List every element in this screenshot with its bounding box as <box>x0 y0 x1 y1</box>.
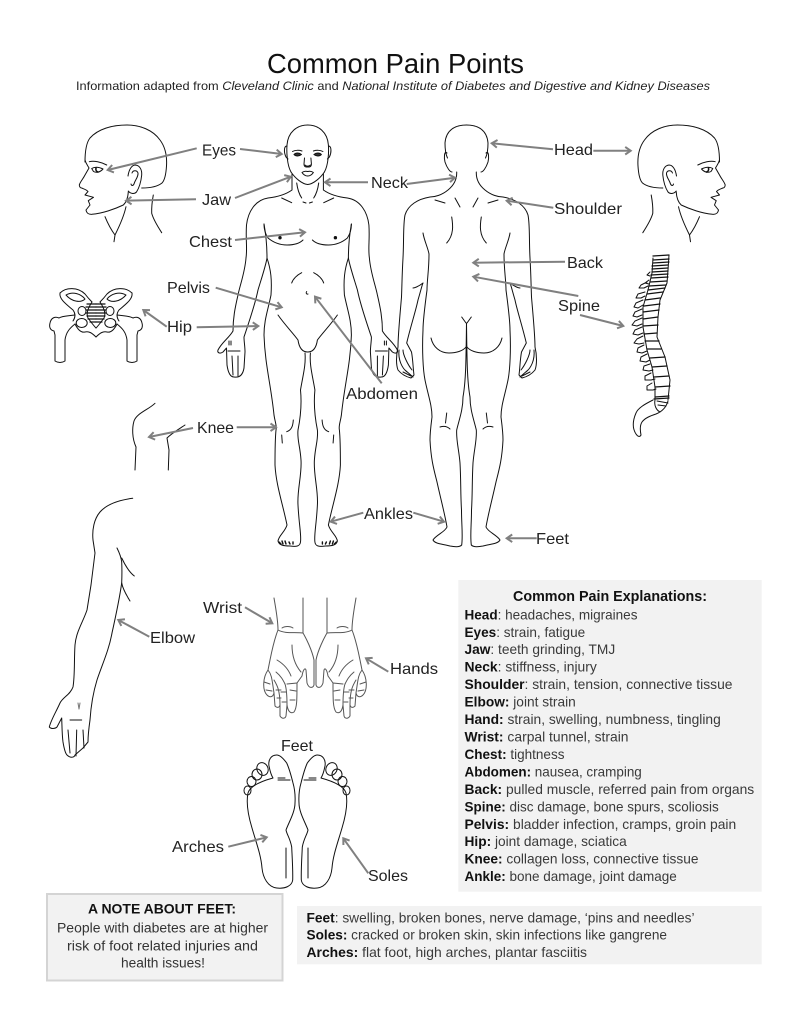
panel: feet explanations <box>297 906 762 964</box>
note body <box>57 921 269 971</box>
arrows <box>108 143 631 873</box>
explanation list: Chest: tightness <box>464 746 564 762</box>
explanation list: Jaw: teeth grinding, TMJ <box>464 641 615 657</box>
panel: common pain explanations <box>458 580 762 892</box>
back body figure <box>396 125 536 547</box>
arrow: hands <box>366 658 388 672</box>
panel: a note about feet <box>47 894 282 980</box>
note body: health issues! <box>121 956 205 971</box>
arrow: knee to front body <box>237 426 276 428</box>
explanation list: Shoulder: strain, tension, connective tissue <box>464 676 733 692</box>
feet explanation list: Arches: flat foot, high arches, plantar fasciitis <box>306 944 587 960</box>
explanation list: Abdomen: nausea, cramping <box>464 763 642 779</box>
explanation list: Pelvis: bladder infection, cramps, groin pain <box>464 816 736 832</box>
icon: feet soles <box>244 755 350 888</box>
arrow: wrist <box>245 607 272 623</box>
front body figure <box>218 125 398 546</box>
icon: spine <box>632 255 670 436</box>
icon: arm <box>49 498 134 757</box>
label: feet: Feet <box>536 531 570 548</box>
arrow: jaw to front body <box>235 177 291 198</box>
note body: People with diabetes are at higher <box>57 921 269 936</box>
arrow: jaw to side head <box>126 199 196 201</box>
explanation list: Hip: joint damage, sciatica <box>464 833 627 849</box>
arrow: eyes to side head <box>108 148 197 170</box>
arrow: neck to front body <box>325 181 368 183</box>
arrow: neck to back body <box>407 178 455 184</box>
explanation list: Eyes: strain, fatigue <box>464 624 585 640</box>
label: head: Head <box>554 142 593 159</box>
note body: risk of foot related injuries and <box>67 938 258 953</box>
explanation list <box>464 606 754 884</box>
arrow: spine to back body <box>473 277 578 296</box>
label: back: Back <box>567 255 604 272</box>
arrow: arches <box>228 837 267 847</box>
explanation list: Neck: stiffness, injury <box>464 659 597 675</box>
arrow: head to back body <box>492 143 553 149</box>
title: Common Pain Points <box>267 48 524 79</box>
body part labels <box>150 142 623 885</box>
arrow: spine to spine icon <box>580 315 623 326</box>
label: eyes: Eyes <box>202 142 236 160</box>
arrow: head to side head <box>593 150 631 152</box>
feet explanation list <box>306 909 694 960</box>
arrow: feet <box>507 537 537 539</box>
arrow: shoulder <box>507 201 553 208</box>
arrow: hip to front body <box>197 326 258 327</box>
note heading: A NOTE ABOUT FEET: <box>88 900 236 916</box>
label: hip: Hip <box>167 319 192 336</box>
icon: side knee <box>133 403 185 470</box>
explanation list: Head: headaches, migraines <box>464 606 638 622</box>
explanation list: Ankle: bone damage, joint damage <box>464 868 677 884</box>
icon: pelvis and hips <box>50 289 142 362</box>
arrow: ankles to back body <box>413 513 444 522</box>
label: soles: Soles <box>368 868 408 885</box>
icon: left-facing head profile <box>79 125 167 242</box>
label: feet above soles: Feet <box>281 738 314 755</box>
icon: right-facing head profile <box>638 125 725 242</box>
arrow: soles <box>343 838 368 873</box>
arrow: pelvis <box>216 288 282 307</box>
label: spine: Spine <box>558 298 600 315</box>
label: elbow: Elbow <box>150 630 195 647</box>
arrow: hip to pelvis bones <box>143 310 167 327</box>
label: ankles: Ankles <box>364 506 413 523</box>
label: hands: Hands <box>390 661 438 678</box>
explanation list: Back: pulled muscle, referred pain from organs <box>464 781 754 797</box>
arrow: back <box>473 262 565 263</box>
label: shoulder: Shoulder <box>554 201 623 218</box>
feet explanation list: Feet: swelling, broken bones, nerve damage, ‘pins and needles’ <box>306 909 694 925</box>
arrow: chest <box>235 232 305 240</box>
explanation list: Knee: collagen loss, connective tissue <box>464 851 699 867</box>
label: neck: Neck <box>371 175 409 192</box>
icon: hands <box>264 598 366 718</box>
explanation list: Elbow: joint strain <box>464 694 576 710</box>
panel heading: Common Pain Explanations: <box>513 588 707 605</box>
label: pelvis: Pelvis <box>167 280 210 297</box>
explanation list: Hand: strain, swelling, numbness, tingling <box>464 711 721 727</box>
label: jaw: Jaw <box>202 192 231 209</box>
arrow: elbow <box>118 620 149 637</box>
label: wrist: Wrist <box>203 600 243 617</box>
feet explanation list: Soles: cracked or broken skin, skin infections like gangrene <box>306 927 667 943</box>
explanation list: Spine: disc damage, bone spurs, scoliosis <box>464 798 719 814</box>
arrow: eyes to front body <box>240 149 282 154</box>
arrow: ankles to front body <box>331 513 363 522</box>
subtitle: sources: Information adapted from Cleveland Clinic and National Institute of Diabetes and Digestive and Kidney Diseases <box>76 79 710 93</box>
label: knee: Knee <box>197 420 234 437</box>
label: abdomen: Abdomen <box>346 386 418 403</box>
arrow: abdomen <box>315 297 382 383</box>
explanation list: Wrist: carpal tunnel, strain <box>464 728 628 744</box>
arrow: knee to side knee <box>149 428 193 437</box>
label: chest: Chest <box>189 234 233 251</box>
label: arches: Arches <box>172 839 224 856</box>
